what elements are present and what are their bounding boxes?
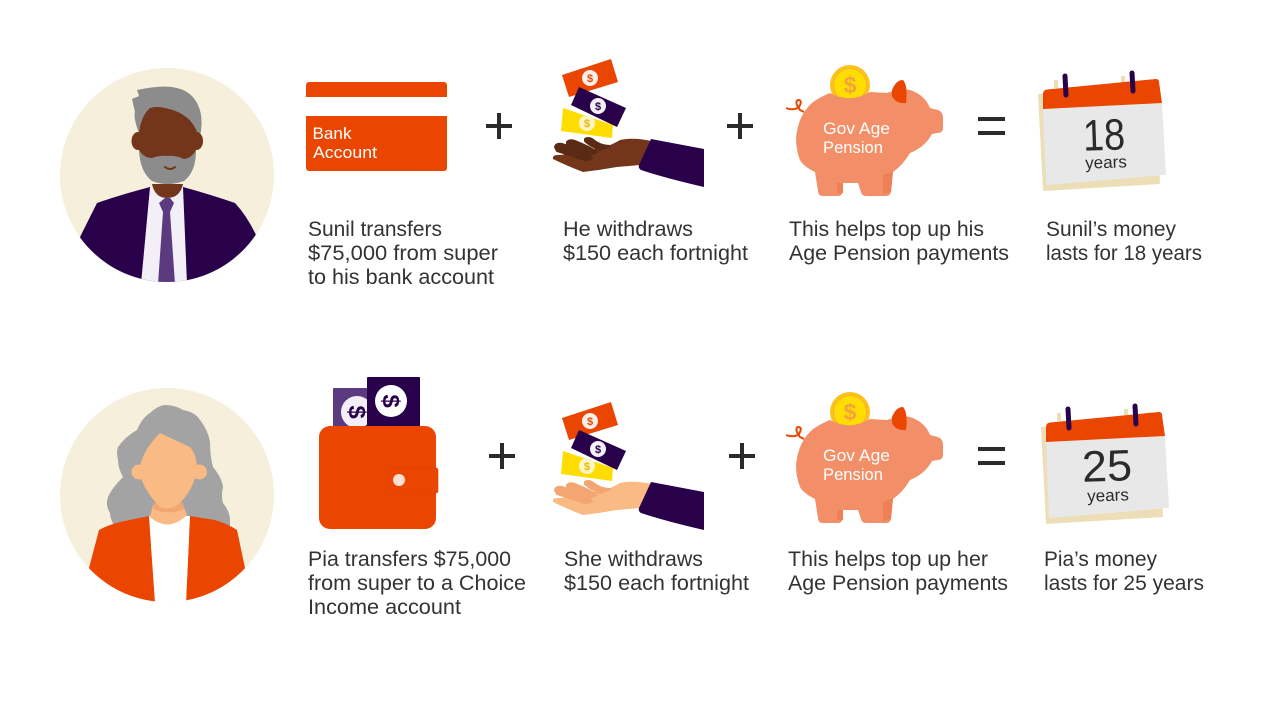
text: step 3 Pia: This helps top up her xyxy=(788,548,988,571)
text: step 2 Pia: $150 each fortnight xyxy=(564,572,749,595)
icon: Gov Age Pension piggy bank xyxy=(786,65,943,196)
equals sign xyxy=(978,119,1005,133)
icon: Gov Age Pension piggy bank: Pension xyxy=(823,465,883,484)
text: step 1 Pia: from super to a Choice xyxy=(308,572,526,595)
plus sign xyxy=(486,113,512,139)
equals sign xyxy=(978,449,1005,463)
portrait: Sunil xyxy=(60,68,274,290)
icon: Gov Age Pension piggy bank: $ xyxy=(844,399,857,425)
icon: calendar 25 years: years xyxy=(1087,485,1129,506)
text: step 3 Sunil: This helps top up his xyxy=(789,218,984,241)
text: step 2 Pia: She withdraws xyxy=(564,548,703,571)
icon: Pia's hand with money: $ xyxy=(587,416,593,428)
text: step 1 Sunil: Sunil transfers xyxy=(308,218,442,241)
icon: Pia's hand with money: $ xyxy=(595,444,601,456)
plus sign xyxy=(727,113,753,139)
icon: Sunil's hand with money: $ xyxy=(587,73,593,85)
icon: Gov Age Pension piggy bank: Pension xyxy=(823,138,883,157)
text: step 1 Pia: Income account xyxy=(308,596,461,619)
icon: bank card: Bank xyxy=(312,124,352,143)
icon: Sunil's hand with money: $ xyxy=(584,118,590,130)
icon: wallet with cash: $ xyxy=(377,394,404,408)
text: step 2 Sunil: He withdraws xyxy=(563,218,693,241)
icon: bank card xyxy=(306,82,447,171)
plus sign xyxy=(729,443,755,469)
icon: calendar 25 years xyxy=(1041,406,1169,524)
icon: wallet with cash: $ xyxy=(343,405,370,419)
icon: Sunil's hand with money xyxy=(553,59,704,187)
icon: Pia's hand with money xyxy=(553,402,704,530)
icon: calendar 25 years: 25 xyxy=(1081,441,1133,492)
text: result Pia: Pia’s money xyxy=(1044,548,1157,571)
icon: calendar 18 years xyxy=(1038,73,1166,191)
text: step 1 Sunil: $75,000 from super xyxy=(308,242,498,265)
icon: Pia's hand with money: $ xyxy=(584,461,590,473)
icon: Sunil's hand with money: $ xyxy=(595,101,601,113)
text: step 1 Pia: Pia transfers $75,000 xyxy=(308,548,511,571)
icon: bank card: Account xyxy=(313,143,377,162)
icon: wallet with cash xyxy=(319,377,438,529)
text: result Sunil: lasts for 18 years xyxy=(1046,242,1202,265)
icon: Gov Age Pension piggy bank: $ xyxy=(844,72,857,98)
text: step 3 Pia: Age Pension payments xyxy=(788,572,1008,595)
icon: calendar 18 years: 18 xyxy=(1082,110,1126,161)
icon: calendar 18 years: years xyxy=(1085,152,1127,173)
text: step 3 Sunil: Age Pension payments xyxy=(789,242,1009,265)
portrait: Pia xyxy=(60,388,274,602)
text: step 2 Sunil: $150 each fortnight xyxy=(563,242,748,265)
icon: Gov Age Pension piggy bank: Gov Age xyxy=(823,446,890,465)
icon: Gov Age Pension piggy bank xyxy=(786,392,943,523)
text: result Sunil: Sunil’s money xyxy=(1046,218,1176,241)
text: step 1 Sunil: to his bank account xyxy=(308,266,494,289)
icon: Gov Age Pension piggy bank: Gov Age xyxy=(823,119,890,138)
plus sign xyxy=(489,443,515,469)
text: result Pia: lasts for 25 years xyxy=(1044,572,1204,595)
